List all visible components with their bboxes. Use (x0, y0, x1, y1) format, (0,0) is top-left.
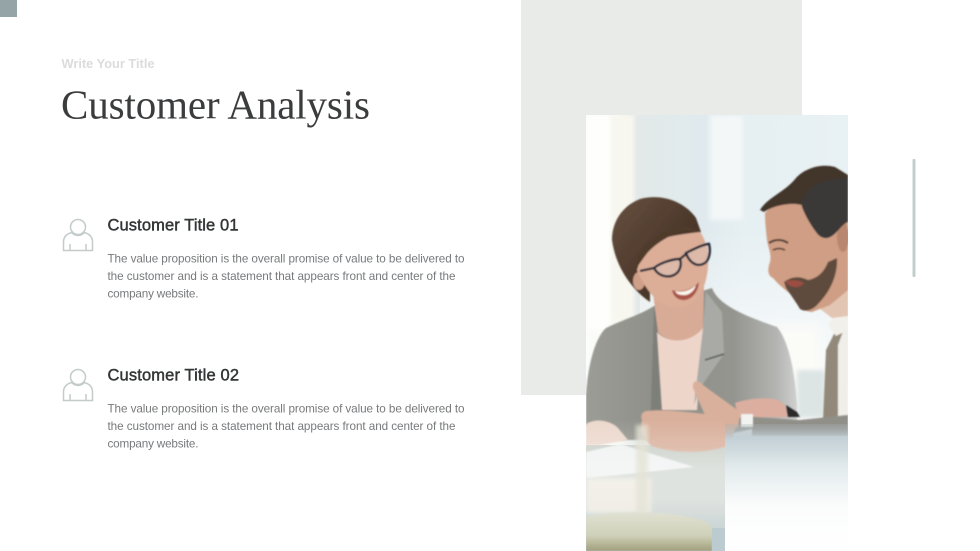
customer block 01 (64, 216, 465, 300)
ear (837, 223, 848, 252)
neck (820, 290, 848, 318)
man's sleeve (752, 415, 848, 436)
thumb (693, 381, 740, 428)
eye and brow (769, 240, 788, 243)
description 02: The value proposition is the overall promise of value to be delivered to (108, 402, 465, 416)
beard (784, 258, 837, 311)
customer block 02 (64, 366, 465, 450)
description 01 (108, 252, 465, 300)
back hair (612, 197, 701, 302)
corner accent square (0, 0, 17, 17)
glass veil over hand (586, 431, 725, 528)
description 02 (108, 402, 465, 450)
glass reflection (636, 425, 648, 517)
heading 01: Customer Title 01 (108, 216, 238, 234)
laptop sheet (586, 444, 694, 478)
jacket (586, 288, 797, 440)
ear (633, 272, 645, 290)
lapel (694, 292, 724, 405)
vertical accent bar (912, 159, 916, 277)
description 01: the customer and is a statement that appears front and center of the (108, 270, 456, 283)
photo: two colleagues talking at a table (586, 115, 849, 551)
description 02: company website. (108, 438, 198, 450)
face (765, 197, 848, 312)
lower scene (586, 381, 848, 551)
description 01: company website. (108, 288, 198, 300)
grey background panel (521, 0, 802, 395)
heading 02: Customer Title 02 (108, 366, 239, 384)
neck (652, 285, 704, 342)
icon: person 01 (64, 220, 92, 250)
blouse (657, 328, 703, 410)
white translucent block (725, 424, 848, 551)
hair sweep (638, 236, 668, 265)
photo background window (586, 115, 848, 445)
hair dark side (802, 178, 848, 238)
cup (586, 513, 712, 551)
description 01: The value proposition is the overall promise of value to be delivered to (108, 252, 465, 266)
table (586, 445, 725, 551)
small heading: Write Your Title (62, 56, 154, 71)
title: Customer Analysis (61, 82, 370, 128)
face (636, 231, 709, 296)
left hand (586, 421, 628, 445)
description 02: the customer and is a statement that appears front and center of the (108, 420, 456, 433)
smile (672, 282, 699, 300)
cuff (741, 414, 753, 427)
glasses (640, 244, 710, 276)
mouth (785, 280, 804, 287)
gesturing hand (641, 381, 740, 452)
jacket and shirt (822, 332, 843, 418)
man (760, 166, 849, 420)
icon: person 02 (64, 370, 92, 400)
fingers and palm (641, 410, 738, 452)
woman (586, 197, 797, 440)
right hands on table (735, 398, 789, 418)
hair brown front (760, 166, 848, 212)
